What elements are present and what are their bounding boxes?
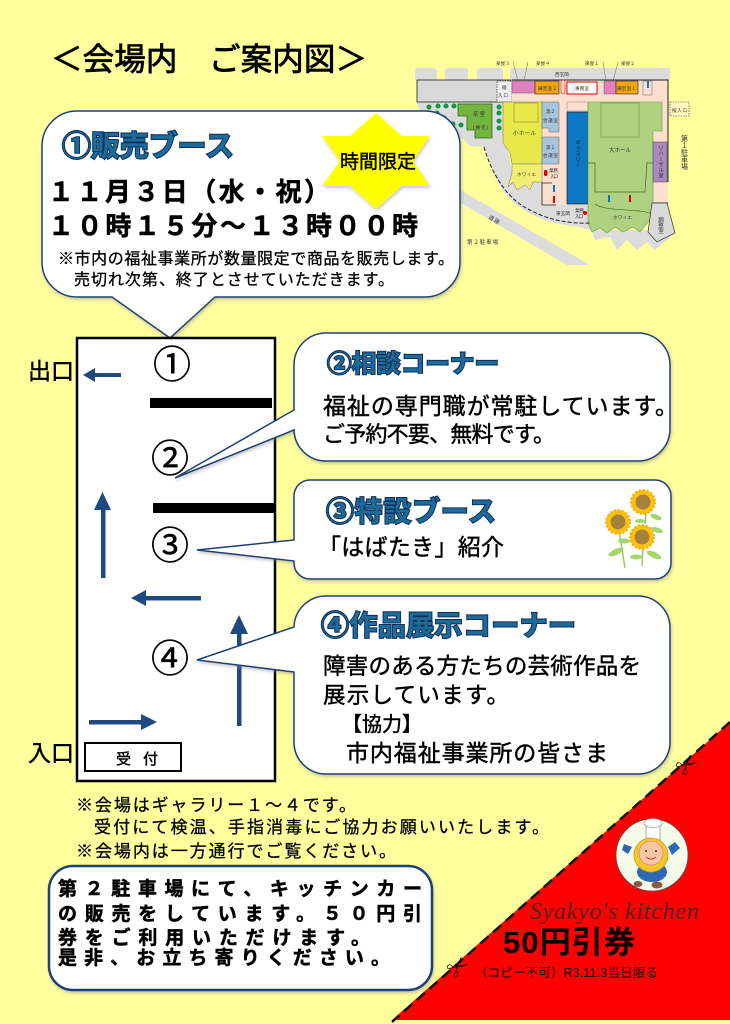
- venue map: [415, 60, 689, 265]
- label: entrance: 入口: [28, 740, 74, 766]
- venue map: 業務: [549, 167, 558, 174]
- venue map: 道路: [487, 213, 502, 226]
- badge: limited time star: [322, 113, 430, 209]
- panel: kitchen car notice: [49, 866, 432, 990]
- date: １１月３日（水・祝）: [48, 177, 330, 207]
- venue map: 第１: [546, 144, 555, 151]
- venue map: リハーサル室: [657, 145, 664, 178]
- panel: kitchen car notice: 第２駐車場にて、キッチンカー: [58, 878, 422, 900]
- heading: art exhibition: ④作品展示コーナー: [321, 610, 576, 641]
- arrow: up left: [94, 492, 111, 578]
- venue map: ギャラリー: [574, 140, 581, 168]
- badge: limited time star: 時間限定: [340, 151, 416, 173]
- callout: special booth: [197, 480, 671, 579]
- panel: kitchen car notice: 券をご利用いただけます。: [58, 926, 370, 949]
- venue map: 事務室: [575, 85, 589, 92]
- venue map: 小ホール: [513, 129, 536, 137]
- venue map: 西玄関: [555, 71, 569, 78]
- consultation text: 福祉の専門職が常駐しています。: [323, 393, 678, 419]
- zone number 4: ④: [151, 639, 189, 681]
- zone number 2: ②: [151, 439, 189, 481]
- reception: [85, 743, 181, 771]
- arrow: entrance: [89, 714, 157, 730]
- venue map: 搬入口: [672, 107, 687, 114]
- venue map: 第２: [546, 108, 555, 115]
- icon: scissors bottom: ✂: [444, 953, 473, 983]
- label: exit: 出口: [28, 358, 74, 384]
- venue map: 入口: [575, 214, 583, 220]
- brand name: Syakyo's kitchen: [530, 899, 699, 925]
- notes: ※会場内は一方通行でご覧ください。: [76, 842, 396, 861]
- arrow: up right: [230, 615, 248, 726]
- note: ※市内の福祉事業所が数量限定で商品を販売します。: [58, 250, 454, 268]
- callout: art exhibition corner: [197, 596, 670, 774]
- reception: 受 付: [116, 751, 158, 768]
- callout: sales booth: 売切れ次第、終了とさせていただきます。: [74, 271, 394, 289]
- heading: special booth: ③特設ブース: [326, 495, 496, 527]
- arrow: left: [131, 590, 201, 606]
- venue map: 業務: [575, 207, 584, 214]
- venue map: 大ホール: [609, 146, 631, 154]
- venue map: ホワイエ: [517, 172, 536, 177]
- venue map: 楽屋３: [496, 60, 510, 67]
- venue map: ホワイエ: [613, 215, 632, 220]
- zone number 1: ①: [153, 345, 191, 387]
- venue map: 調整室: [657, 217, 664, 234]
- arrow: exit: [83, 368, 121, 382]
- venue map: 会議室: [543, 152, 558, 159]
- zone number 3: ③: [151, 526, 189, 568]
- icon: sunflowers: [606, 490, 663, 568]
- venue map: 茶室: [473, 110, 485, 118]
- coupon: red triangle: [392, 722, 730, 1022]
- venue map: 楽屋２: [621, 60, 635, 67]
- logo: chef character: [616, 818, 688, 891]
- heading: consultation: ②相談コーナー: [327, 350, 499, 378]
- callout: consultation corner: ご予約不要、無料です。: [323, 422, 555, 447]
- floor plan box: [77, 338, 275, 781]
- heading: sales booth: ①販売ブース: [62, 129, 234, 163]
- special booth text: 「はばたき」紹介: [318, 534, 504, 560]
- callout: art exhibition corner: 市内福祉事業所の皆さま: [346, 740, 608, 766]
- venue map: 第２駐車場: [467, 238, 498, 246]
- coupon note: （コピー不可）R3.11.3当日限る: [475, 966, 658, 980]
- art exhibition text: 障害のある方たちの芸術作品を: [323, 654, 641, 679]
- callout: art exhibition corner: 展示しています。: [323, 683, 509, 708]
- panel: kitchen car notice: 是非、お立ち寄りください。: [58, 946, 390, 969]
- coupon value: 50円引券: [503, 925, 635, 960]
- callout: consultation corner: [175, 333, 678, 478]
- venue map: 楽屋１: [585, 60, 599, 67]
- venue map: (棟兜): [473, 124, 488, 131]
- venue map: 練習室２: [538, 85, 557, 92]
- venue map: 搬: [502, 84, 507, 91]
- title: ＜会場内 ご案内図＞: [51, 41, 367, 77]
- callout: sales booth: [42, 111, 460, 338]
- notes: 受付にて検温、手指消毒にご協力お願いいたします。: [94, 818, 549, 837]
- notes: [76, 796, 549, 861]
- callout: art exhibition corner: 【協力】: [342, 713, 422, 736]
- icon: scissors top: ✂: [673, 751, 702, 781]
- notes: ※会場はギャラリー１～４です。: [76, 796, 356, 815]
- venue map: 第１駐車場: [680, 134, 688, 171]
- panel: kitchen car notice: の販売をしています。５０円引: [58, 903, 422, 925]
- venue map: 入口: [550, 174, 558, 180]
- venue map: 楽屋４: [536, 60, 550, 67]
- time: １０時１５分～１３時００時: [48, 211, 418, 241]
- venue map: 練習室１: [617, 85, 636, 92]
- venue map: 会議室: [543, 117, 558, 124]
- venue map: 東玄関: [556, 210, 570, 217]
- venue map: 入口: [498, 93, 508, 99]
